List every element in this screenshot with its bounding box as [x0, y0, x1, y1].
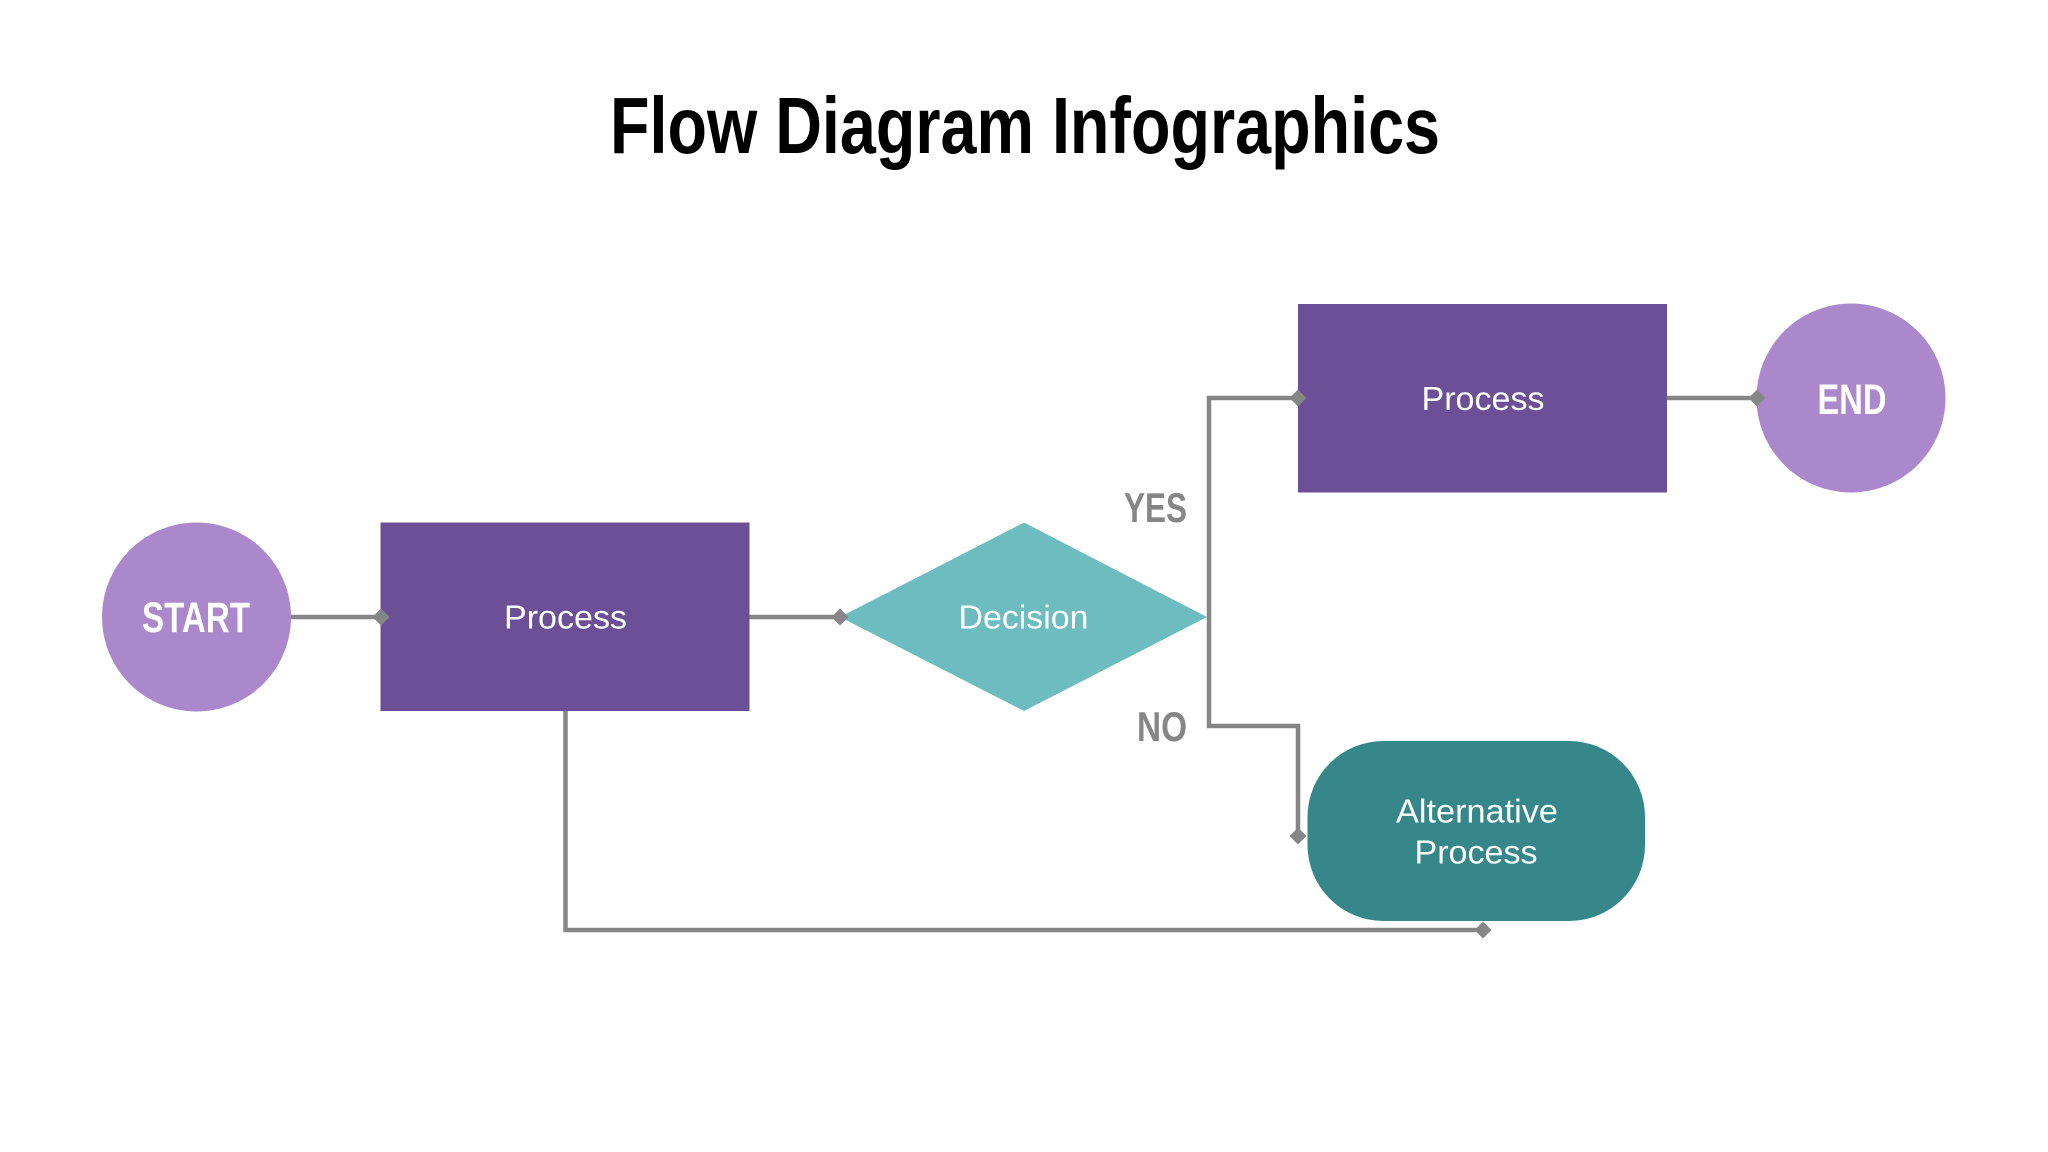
connector: upper process to end [1667, 396, 1757, 400]
connector: process to decision [749, 615, 840, 619]
start node: START [142, 594, 250, 642]
process box: first: Process [504, 600, 627, 636]
process box: upper: Process [1422, 381, 1544, 418]
connector end markers [372, 390, 1766, 938]
start node [102, 522, 291, 712]
process box: first [380, 522, 750, 711]
alternative process box: Process [1414, 834, 1538, 872]
title: Flow Diagram Infographics [610, 81, 1440, 170]
connector: process to alternative process [566, 711, 1483, 930]
process box: upper [1298, 304, 1667, 492]
label: yes: YES [1124, 484, 1187, 531]
connector: decision yes branch to upper process [1207, 398, 1298, 617]
label: no: NO [1137, 703, 1187, 750]
end node: END [1818, 376, 1886, 424]
connector: start to process [291, 615, 381, 619]
alternative process box [1308, 741, 1645, 921]
decision diamond [840, 522, 1207, 711]
connector: decision no branch to alternative process [1209, 617, 1298, 836]
decision diamond: Decision [958, 600, 1088, 636]
end node [1756, 304, 1946, 492]
alternative process box: Alternative [1396, 794, 1558, 830]
